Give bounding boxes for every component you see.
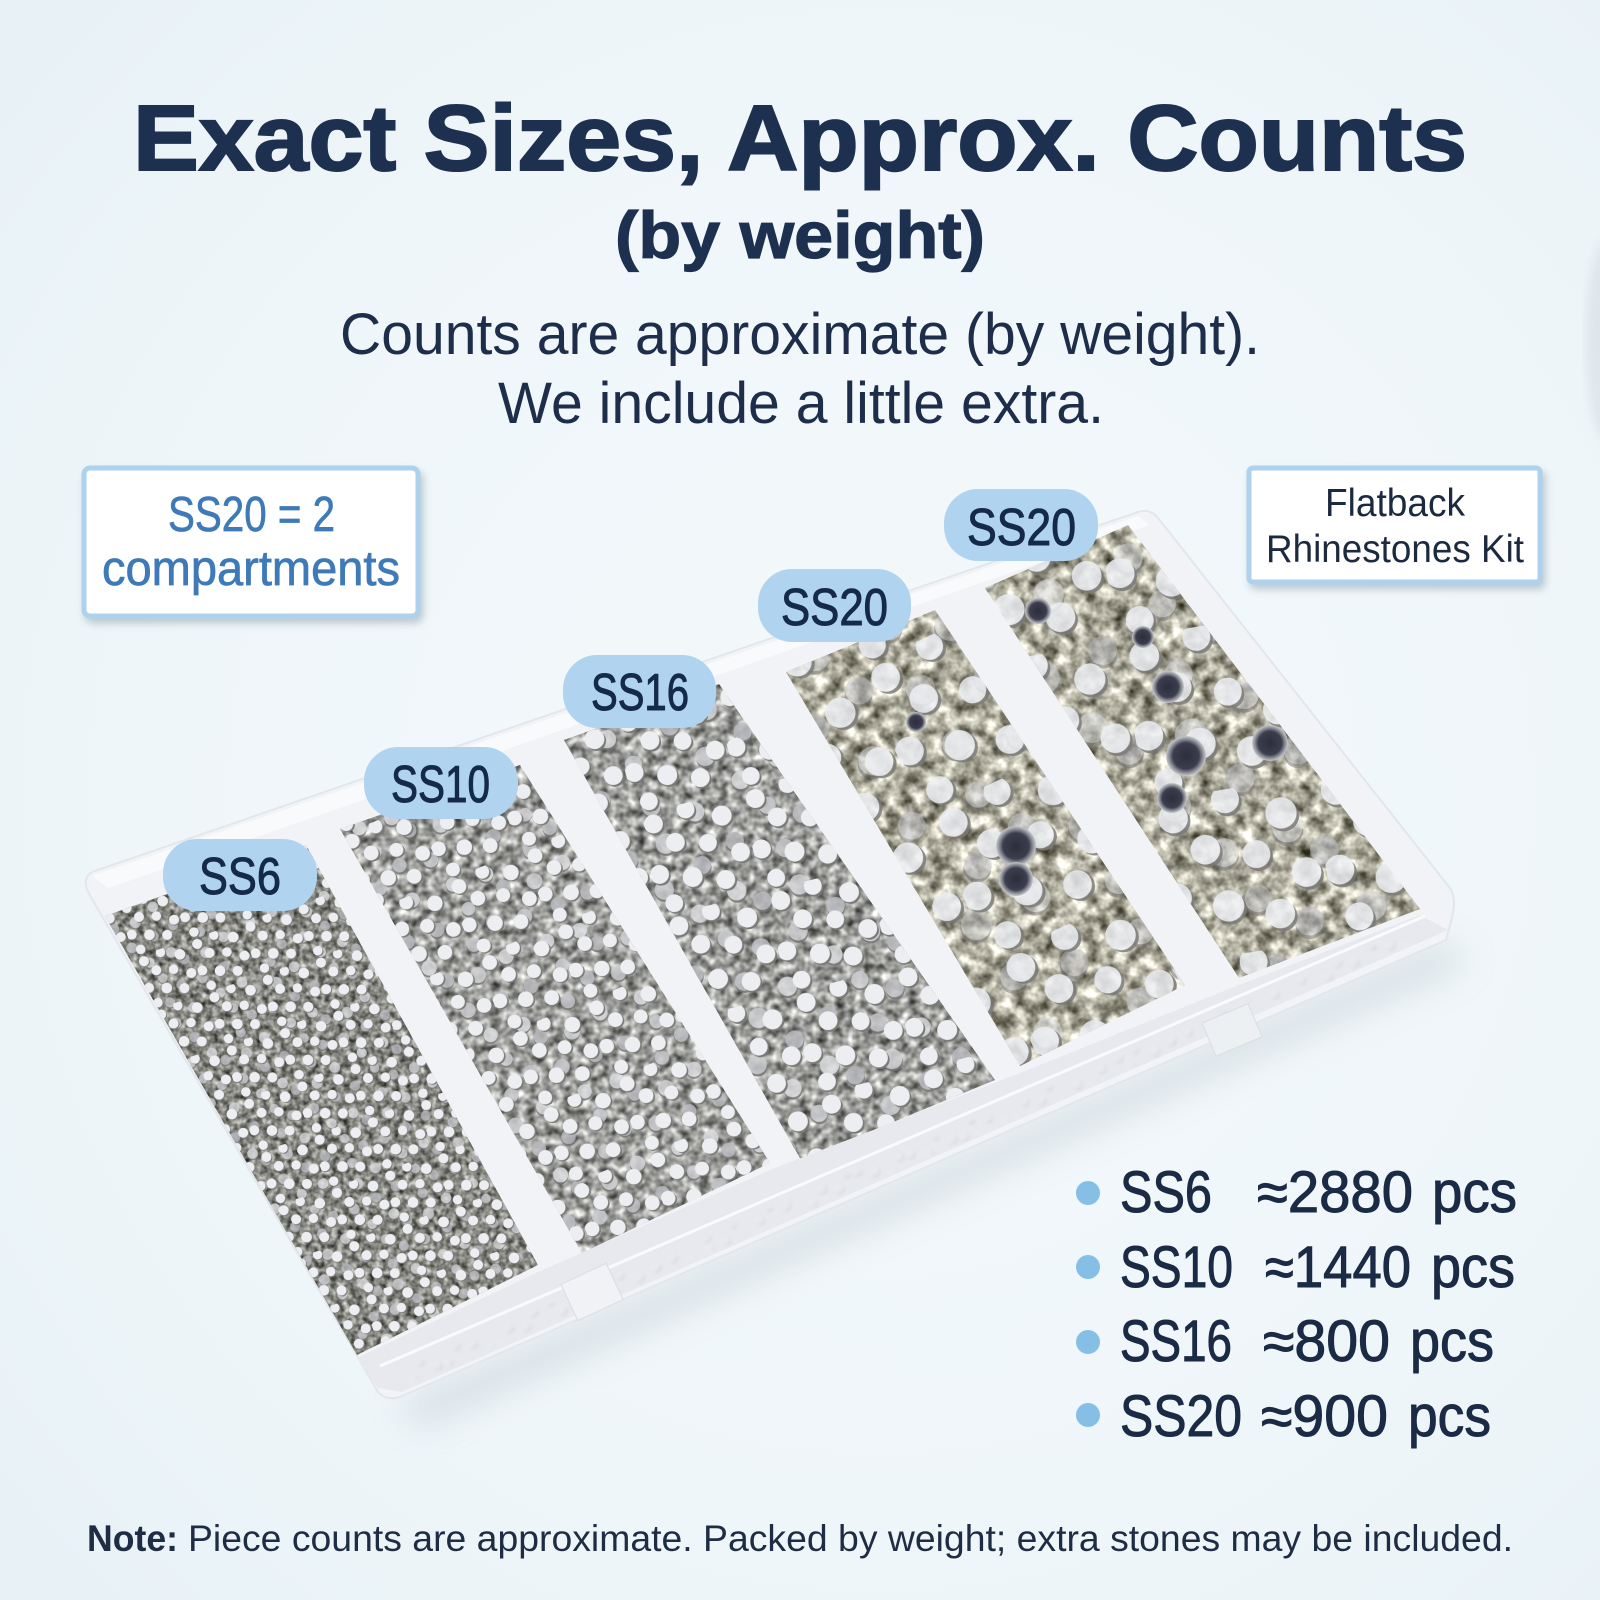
row SS10 — [1076, 1235, 1515, 1300]
callout: SS20 = 2 compartments — [84, 468, 418, 616]
row SS6 — [1076, 1160, 1517, 1225]
tray body — [86, 511, 1454, 1398]
second latch — [1202, 1004, 1262, 1056]
callout: SS20 = 2 compartments: SS20 = 2 — [168, 488, 335, 542]
subtitle: (by weight) — [615, 198, 985, 272]
tray shadow — [400, 945, 1470, 1425]
label pill: SS16: SS16 — [591, 664, 689, 722]
label pill: SS6: SS6 — [199, 848, 281, 906]
row SS10: SS10 — [1120, 1235, 1233, 1300]
label pill: SS20 second: SS20 — [967, 499, 1076, 557]
intro text — [340, 302, 1260, 436]
intro text: Counts are approximate (by weight). — [340, 302, 1260, 367]
row SS6: SS6 — [1120, 1160, 1212, 1225]
callout: SS20 = 2 compartments: compartments — [102, 542, 400, 596]
label pill: SS6 — [163, 839, 317, 911]
footnote: Piece counts are approximate. Packed by weight; extra stones may be included. — [188, 1518, 1513, 1559]
dark crystals — [906, 598, 1288, 896]
compartment SS20 second stones — [985, 525, 1420, 978]
row SS16 — [1076, 1309, 1494, 1374]
label pill: SS20 — [758, 569, 911, 642]
label pill: SS16 — [563, 655, 716, 728]
callout: Flatback Rhinestones Kit — [1249, 468, 1540, 582]
label pill: SS10: SS10 — [391, 756, 490, 814]
callout: Flatback Rhinestones Kit: Rhinestones Kit — [1266, 528, 1524, 571]
row SS20: ≈900 — [1261, 1384, 1388, 1449]
row SS6: pcs — [1432, 1160, 1517, 1225]
compartment SS20 stones — [786, 610, 1185, 1066]
title: Exact Sizes, Approx. Counts — [133, 86, 1467, 190]
footnote: Note: — [87, 1518, 178, 1559]
bottom latch — [561, 1263, 623, 1321]
row SS16: pcs — [1410, 1309, 1494, 1374]
label pill: SS10 — [364, 747, 518, 819]
tray of rhinestones — [86, 511, 1470, 1425]
row SS16: SS16 — [1120, 1309, 1232, 1374]
compartment SS6 stones — [105, 845, 538, 1355]
callout: Flatback Rhinestones Kit: Flatback — [1325, 482, 1465, 525]
wall highlight — [380, 916, 1425, 1366]
compartment SS10 stones — [340, 765, 770, 1253]
soft shadow at right edge — [1586, 240, 1600, 440]
row SS10: pcs — [1431, 1235, 1515, 1300]
top rim — [92, 516, 1150, 888]
row SS6: ≈2880 — [1257, 1160, 1413, 1225]
label pill: SS20 second — [944, 489, 1098, 561]
label pill: SS20: SS20 — [781, 579, 888, 637]
counts list — [1076, 1160, 1517, 1449]
row SS20: pcs — [1408, 1384, 1491, 1449]
front wall — [357, 915, 1448, 1392]
front wall reflections — [395, 936, 1412, 1384]
intro text: We include a little extra. — [498, 371, 1104, 436]
row SS16: ≈800 — [1263, 1309, 1390, 1374]
row SS20 — [1076, 1384, 1491, 1449]
row SS10: ≈1440 — [1265, 1235, 1411, 1300]
row SS20: SS20 — [1120, 1384, 1242, 1449]
compartment SS16 stones — [564, 684, 995, 1160]
